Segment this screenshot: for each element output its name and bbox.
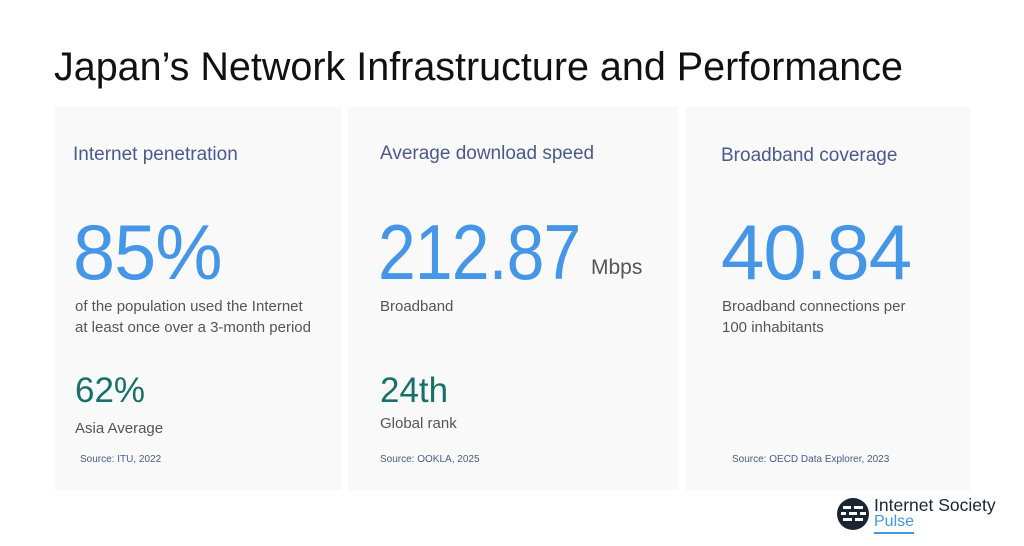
- source: Source: ITU, 2022: [80, 454, 161, 465]
- panel: internet penetration: [55, 107, 341, 490]
- description: Broadband connections per: [722, 298, 905, 315]
- heading: Broadband coverage: [721, 145, 897, 166]
- big number: 40.84: [721, 208, 911, 296]
- big number: 85%: [73, 208, 222, 296]
- title: Japan’s Network Infrastructure and Performance: [54, 45, 903, 89]
- logo subtext: Pulse: [874, 513, 914, 530]
- big number: 212.87: [378, 208, 580, 296]
- secondary label: Asia Average: [75, 420, 163, 437]
- description: [722, 298, 906, 336]
- description: at least once over a 3-month period: [75, 319, 311, 336]
- logo text: Internet Society: [874, 495, 996, 515]
- heading: Average download speed: [380, 143, 594, 164]
- description: [75, 298, 311, 336]
- source: Source: OOKLA, 2025: [380, 454, 480, 465]
- panel: download speed: [348, 107, 678, 490]
- description: of the population used the Internet: [75, 298, 303, 315]
- secondary stat: 24th: [380, 371, 448, 410]
- logo: [837, 495, 996, 534]
- unit: Mbps: [591, 256, 642, 279]
- icon: globe: [837, 498, 869, 530]
- heading: Internet penetration: [73, 144, 238, 165]
- source: Source: OECD Data Explorer, 2023: [732, 454, 889, 465]
- secondary label: Global rank: [380, 415, 457, 432]
- description: Broadband: [380, 298, 453, 315]
- secondary stat: 62%: [75, 371, 145, 410]
- panel: broadband coverage: [685, 107, 971, 490]
- description: 100 inhabitants: [722, 319, 824, 336]
